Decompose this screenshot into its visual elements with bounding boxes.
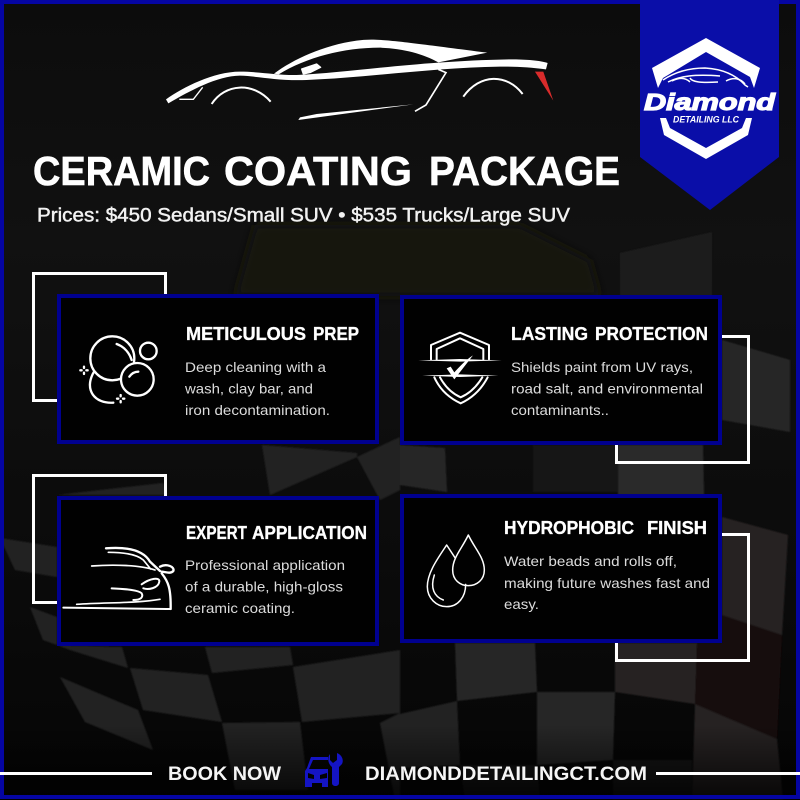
body text: of a durable, high-gloss	[185, 578, 343, 594]
book now label: BOOK NOW	[168, 764, 281, 785]
heading: METICULOUS	[186, 323, 306, 344]
heading: APPLICATION	[252, 522, 367, 543]
body text: ceramic coating.	[185, 600, 295, 616]
title: PACKAGE	[429, 148, 620, 194]
logo: small car	[663, 68, 748, 87]
heading	[186, 522, 367, 543]
body text: wash, clay bar, and	[184, 380, 313, 396]
title	[33, 148, 620, 194]
heading	[511, 323, 708, 344]
icon: car and wrench	[305, 753, 343, 787]
icon: water drops	[427, 535, 484, 607]
panel: expert application	[34, 476, 377, 644]
body text: contaminants..	[511, 402, 609, 418]
website address: DIAMONDDETAILINGCT.COM	[365, 764, 647, 785]
illustration: sports car outline	[166, 40, 553, 120]
heading	[504, 517, 707, 538]
logo: Diamond wordmark: Diamond	[644, 89, 776, 115]
title: CERAMIC	[33, 148, 210, 194]
heading: LASTING	[511, 323, 588, 344]
panel: lasting protection	[402, 297, 748, 462]
body text	[511, 359, 703, 418]
footer call to action	[0, 753, 800, 787]
body text: road salt, and environmental	[511, 380, 703, 396]
logo: hexagon shield bottom	[660, 118, 752, 159]
heading: PROTECTION	[595, 323, 708, 344]
heading: HYDROPHOBIC	[504, 517, 634, 538]
icon: bubbles	[80, 336, 157, 403]
body text: Water beads and rolls off,	[504, 553, 677, 569]
logo: Detailing LLC wordmark: DETAILING LLC	[673, 115, 739, 125]
panel: meticulous prep	[34, 274, 377, 442]
title: COATING	[224, 148, 412, 194]
heading: EXPERT	[186, 522, 248, 543]
body text: Professional application	[185, 557, 345, 573]
body text	[185, 557, 345, 616]
body text: making future washes fast and	[504, 575, 710, 591]
body text: Deep cleaning with a	[185, 359, 326, 375]
icon: speeding car	[63, 548, 174, 609]
heading: PREP	[313, 323, 359, 344]
logo: hexagon shield top	[652, 38, 760, 88]
prices subtitle: Prices: $450 Sedans/Small SUV • $535 Trucks/Large SUV	[37, 206, 570, 226]
logo banner	[640, 0, 779, 210]
icon: shield with check	[418, 333, 502, 403]
panel: hydrophobic finish	[402, 496, 748, 660]
body text: iron decontamination.	[185, 402, 330, 418]
body text: easy.	[504, 596, 539, 612]
body text	[184, 359, 330, 418]
body text: Shields paint from UV rays,	[511, 359, 693, 375]
heading: FINISH	[647, 517, 707, 538]
body text	[504, 553, 710, 612]
